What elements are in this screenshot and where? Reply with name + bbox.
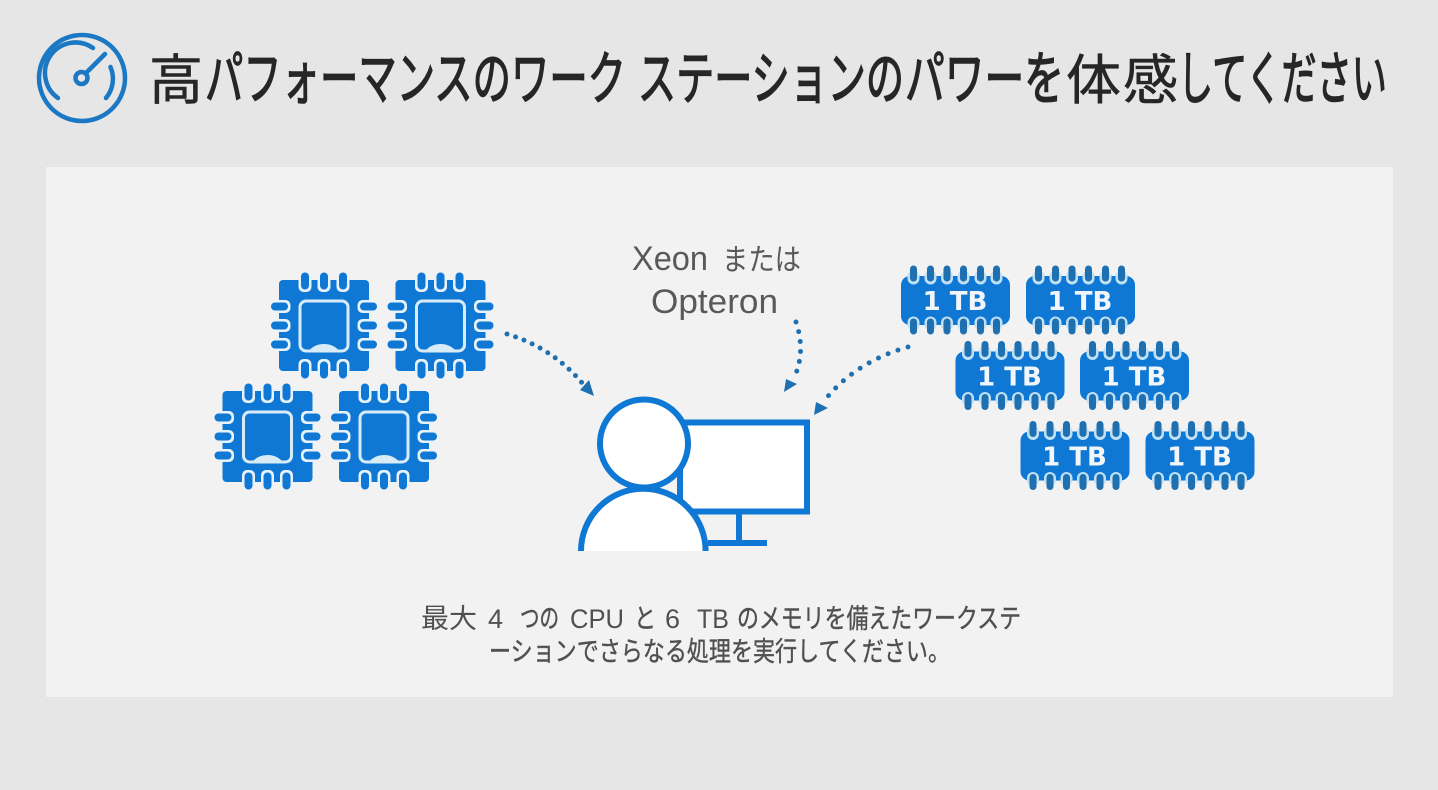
- memory module 5: [1020, 421, 1130, 490]
- processor label: [632, 240, 801, 321]
- memory module 6: 1 TB: [1167, 442, 1232, 472]
- memory module 6: [1146, 421, 1254, 490]
- panel: workstation illustration: [46, 167, 1393, 697]
- memory module 1: 1 TB: [923, 287, 987, 317]
- caption: 最大: [421, 604, 477, 634]
- icon: speedometer gauge: [39, 35, 125, 121]
- title: 高: [149, 51, 203, 111]
- arrow: memory to workstation: [814, 347, 908, 415]
- title: パフォーマンスのワーク: [205, 47, 626, 112]
- caption: 4: [488, 604, 503, 634]
- title: 体: [1066, 51, 1121, 111]
- processor label: または: [722, 244, 801, 277]
- memory module 5: 1 TB: [1042, 442, 1107, 472]
- processor label: Xeon: [632, 240, 708, 278]
- memory module 2: 1 TB: [1048, 287, 1112, 317]
- CPU chip 1: [271, 272, 377, 378]
- CPU chip 3: [214, 384, 320, 490]
- caption: [421, 604, 1021, 667]
- title: 感: [1123, 51, 1178, 111]
- arrow: processor label to workstation: [784, 322, 801, 392]
- caption: CPU: [570, 604, 624, 634]
- memory module 2: [1026, 266, 1135, 334]
- title: ステーションの: [638, 47, 904, 112]
- CPU chip 4: [331, 384, 437, 490]
- memory module group: [901, 266, 1254, 490]
- arrow: CPUs to workstation: [507, 334, 594, 396]
- caption: と: [634, 604, 656, 634]
- caption: つの: [520, 604, 559, 634]
- memory module 4: [1080, 341, 1189, 410]
- caption: TB: [697, 604, 729, 634]
- icon: person: [581, 400, 706, 551]
- title: パワーを: [905, 47, 1064, 112]
- icon: monitor: [680, 422, 807, 543]
- memory module 1: [901, 266, 1010, 334]
- CPU chip group: [214, 272, 494, 490]
- caption: ーションでさらなる処理を実行してください。: [489, 637, 950, 667]
- memory module 3: 1 TB: [977, 362, 1042, 392]
- memory module 3: [956, 341, 1064, 410]
- caption: 6: [665, 604, 680, 634]
- caption: のメモリを備えたワークステ: [737, 604, 1021, 634]
- processor label: Opteron: [651, 283, 778, 321]
- memory module 4: 1 TB: [1102, 362, 1166, 392]
- CPU chip 2: [388, 272, 494, 378]
